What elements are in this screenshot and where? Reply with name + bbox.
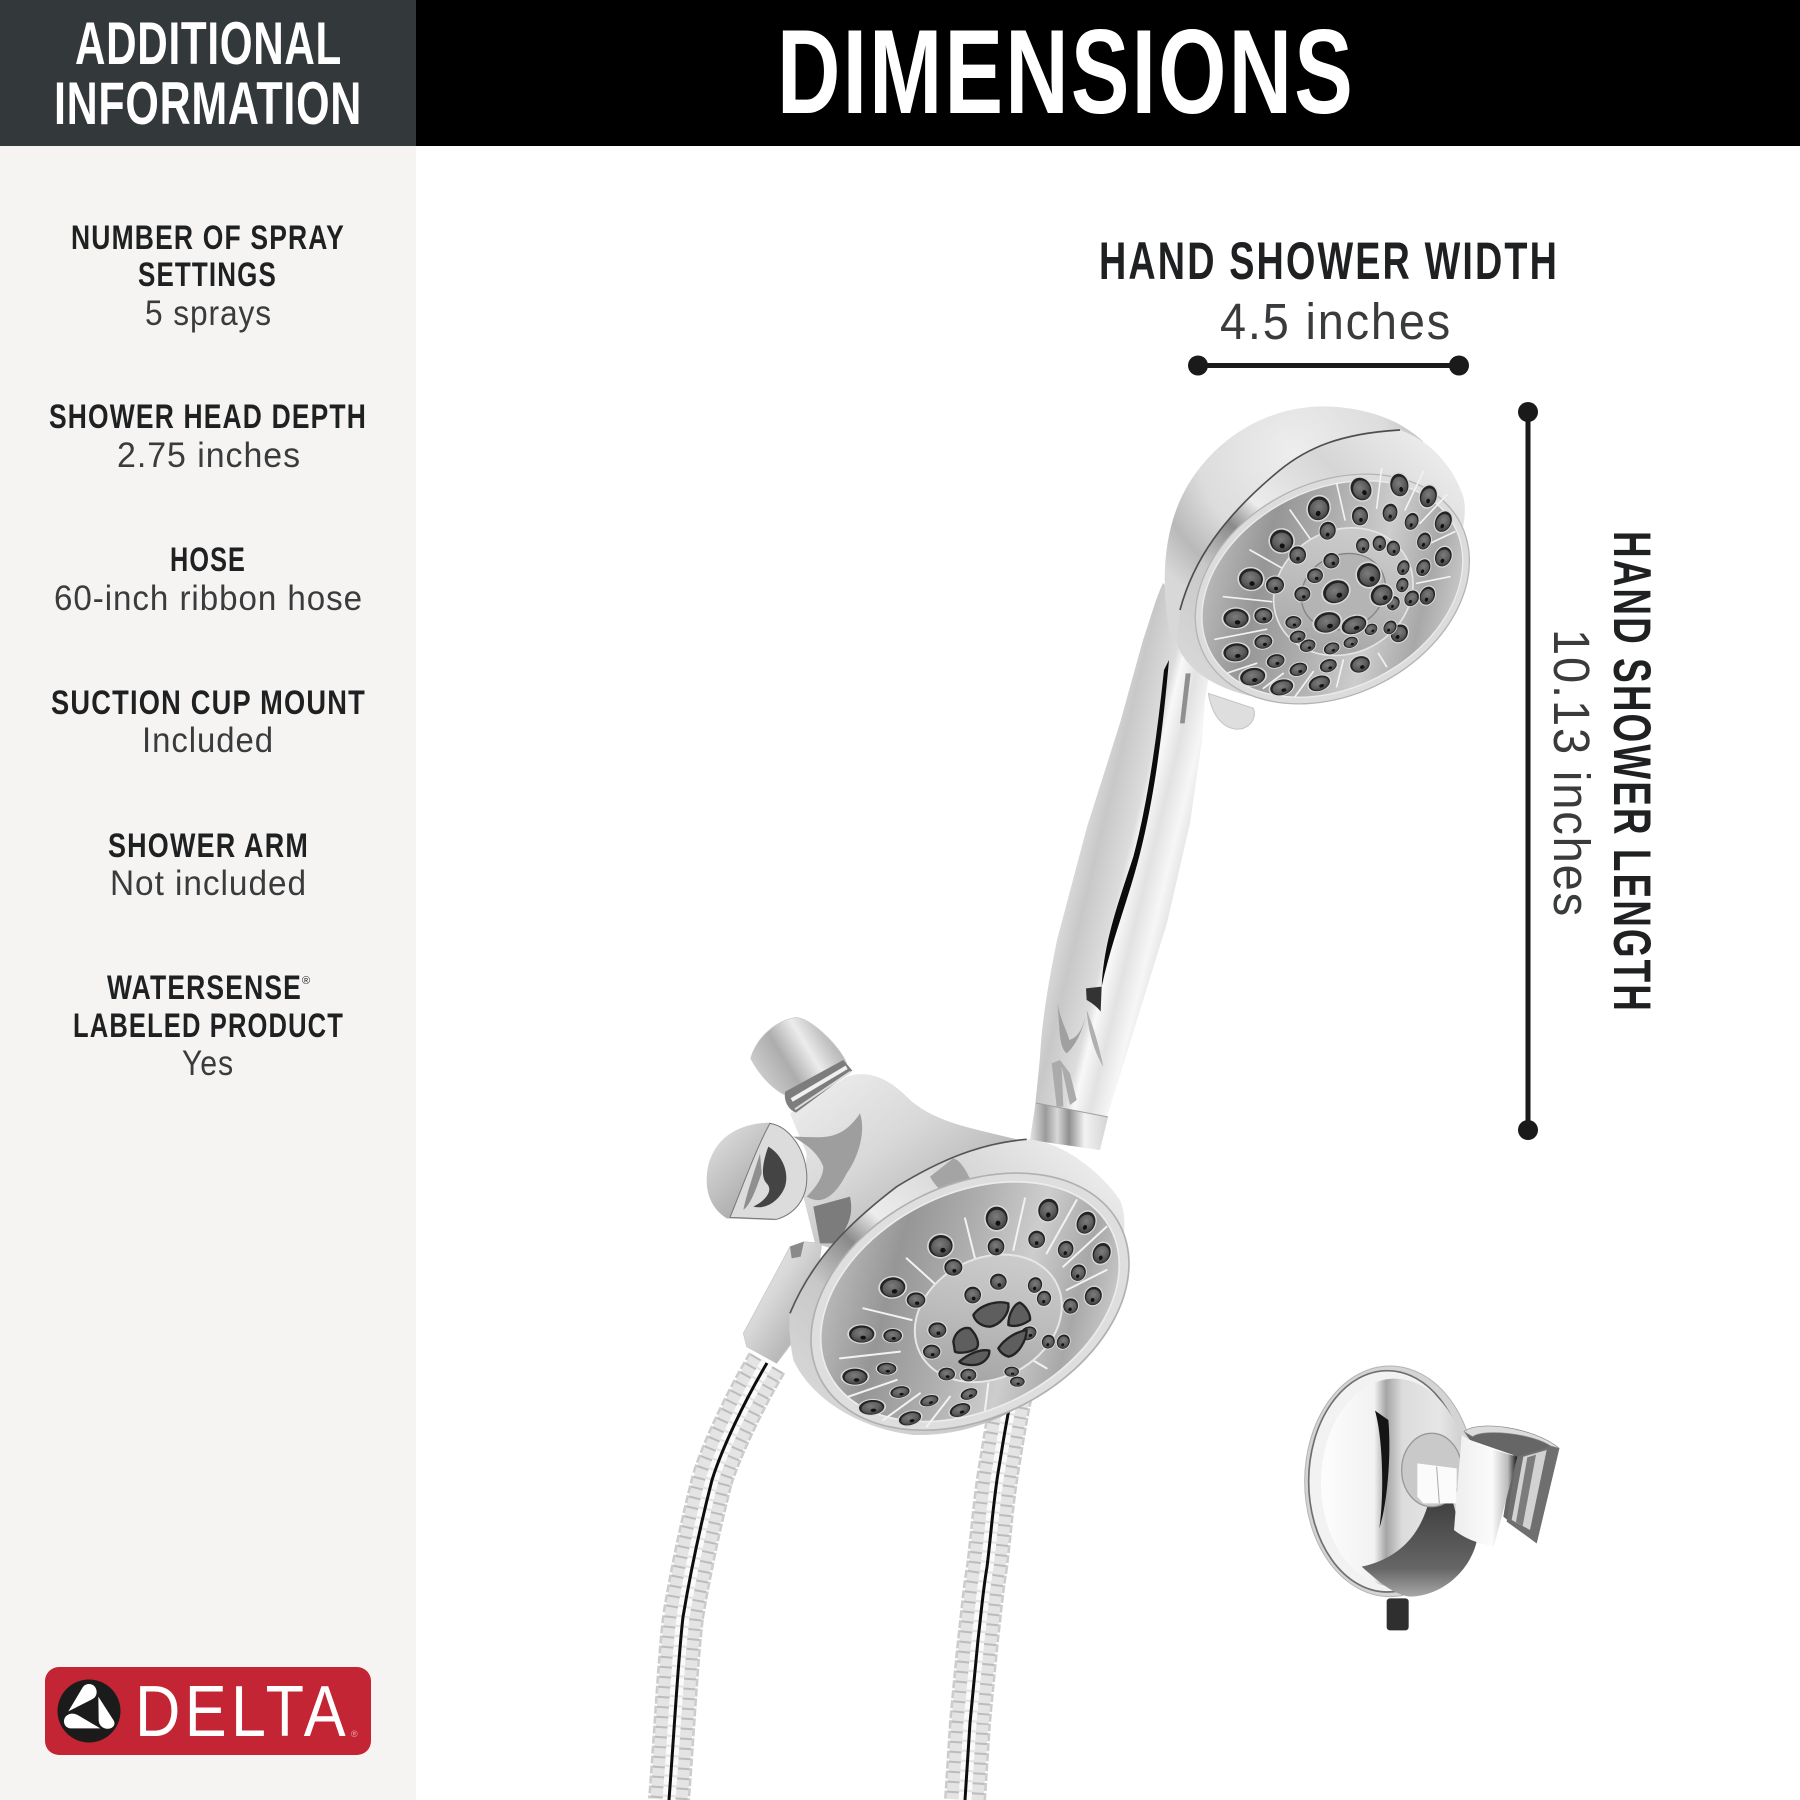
nozzles: upper head (1221, 470, 1457, 699)
spec: shower head depth: 2.75 inches (117, 436, 301, 475)
band (789, 1139, 1124, 1435)
spec: watersense labeled product: WATERSENSE (107, 969, 302, 1007)
dimension label: hand shower length: 10.13 inches (1543, 629, 1600, 918)
spec: shower arm (108, 827, 309, 903)
knob ring (785, 1060, 852, 1113)
wedge: dark lower shell (1362, 1503, 1477, 1597)
dimension label: hand shower length (1543, 531, 1661, 1013)
dimension label: hand shower length: HAND SHOWER LENGTH (1602, 531, 1661, 1013)
dimension label: hand shower width (1099, 232, 1559, 350)
tab: pull tab (1387, 1598, 1409, 1630)
hand shower handle (1030, 583, 1215, 1150)
band (1177, 430, 1465, 701)
ribs: fixed head (840, 1198, 1107, 1427)
header: additional information: ADDITIONAL (75, 10, 342, 77)
neck (1402, 1433, 1462, 1507)
dome (1165, 406, 1423, 643)
disc (1305, 1366, 1475, 1597)
spec: watersense labeled product: Yes (182, 1044, 234, 1083)
logo: delta (45, 1667, 371, 1755)
diverter body with knob and lever (707, 1017, 1033, 1363)
spray lever (1208, 693, 1254, 729)
header: dimensions title: DIMENSIONS (777, 5, 1355, 139)
spec: shower arm: Not included (110, 864, 307, 903)
spec: hose (54, 541, 363, 618)
hose: left (669, 1363, 767, 1800)
spec: shower head depth: SHOWER HEAD DEPTH (49, 398, 367, 436)
spec: hose: HOSE (170, 541, 246, 579)
face (767, 1122, 1173, 1481)
logo: delta: DELTA (135, 1672, 350, 1752)
header: dimensions title (416, 0, 1800, 146)
shower arm connector (743, 1242, 822, 1363)
spec: watersense labeled product (73, 969, 344, 1083)
fixed shower head (767, 1122, 1173, 1481)
hose: right (965, 1385, 1014, 1800)
body funnel (790, 1074, 1033, 1250)
dimension label: hand shower width: 4.5 inches (1220, 293, 1452, 350)
suction cup mount (1305, 1366, 1559, 1630)
dark reflection on disc (1375, 1411, 1389, 1528)
spec: watersense labeled product: ® (302, 975, 310, 987)
spec: number of spray settings: NUMBER OF SPRAY (71, 219, 345, 257)
spec: suction cup mount: SUCTION CUP MOUNT (51, 684, 366, 722)
spec: hose: 60-inch ribbon hose (54, 579, 363, 618)
hand shower head (1156, 406, 1509, 749)
spec: shower head depth (49, 398, 367, 475)
spec: number of spray settings: 5 sprays (145, 294, 272, 333)
ribs: upper head (1215, 468, 1455, 697)
large centre jets: fixed head (953, 1302, 1030, 1365)
holder cup (1454, 1426, 1559, 1546)
panel: additional information sidebar (0, 146, 416, 1800)
reflections: handle (1052, 660, 1191, 1107)
spec: suction cup mount (51, 684, 366, 760)
knob (751, 1017, 847, 1097)
spec: shower arm: SHOWER ARM (108, 827, 309, 865)
header: additional information: INFORMATION (54, 70, 362, 137)
logo: delta: ® (351, 1729, 358, 1739)
spec: suction cup mount: Included (142, 721, 274, 760)
spec: watersense labeled product: LABELED PRODUCT (73, 1007, 344, 1045)
face (1156, 429, 1509, 749)
spec: number of spray settings: SETTINGS (138, 256, 277, 294)
spec: number of spray settings (71, 219, 345, 333)
dimension line: width (1188, 356, 1469, 376)
dimension label: hand shower width: HAND SHOWER WIDTH (1099, 232, 1559, 291)
header: additional information (0, 0, 416, 146)
nozzles: fixed head (841, 1195, 1116, 1429)
lever (707, 1123, 807, 1220)
dimension line: length (1518, 402, 1538, 1140)
